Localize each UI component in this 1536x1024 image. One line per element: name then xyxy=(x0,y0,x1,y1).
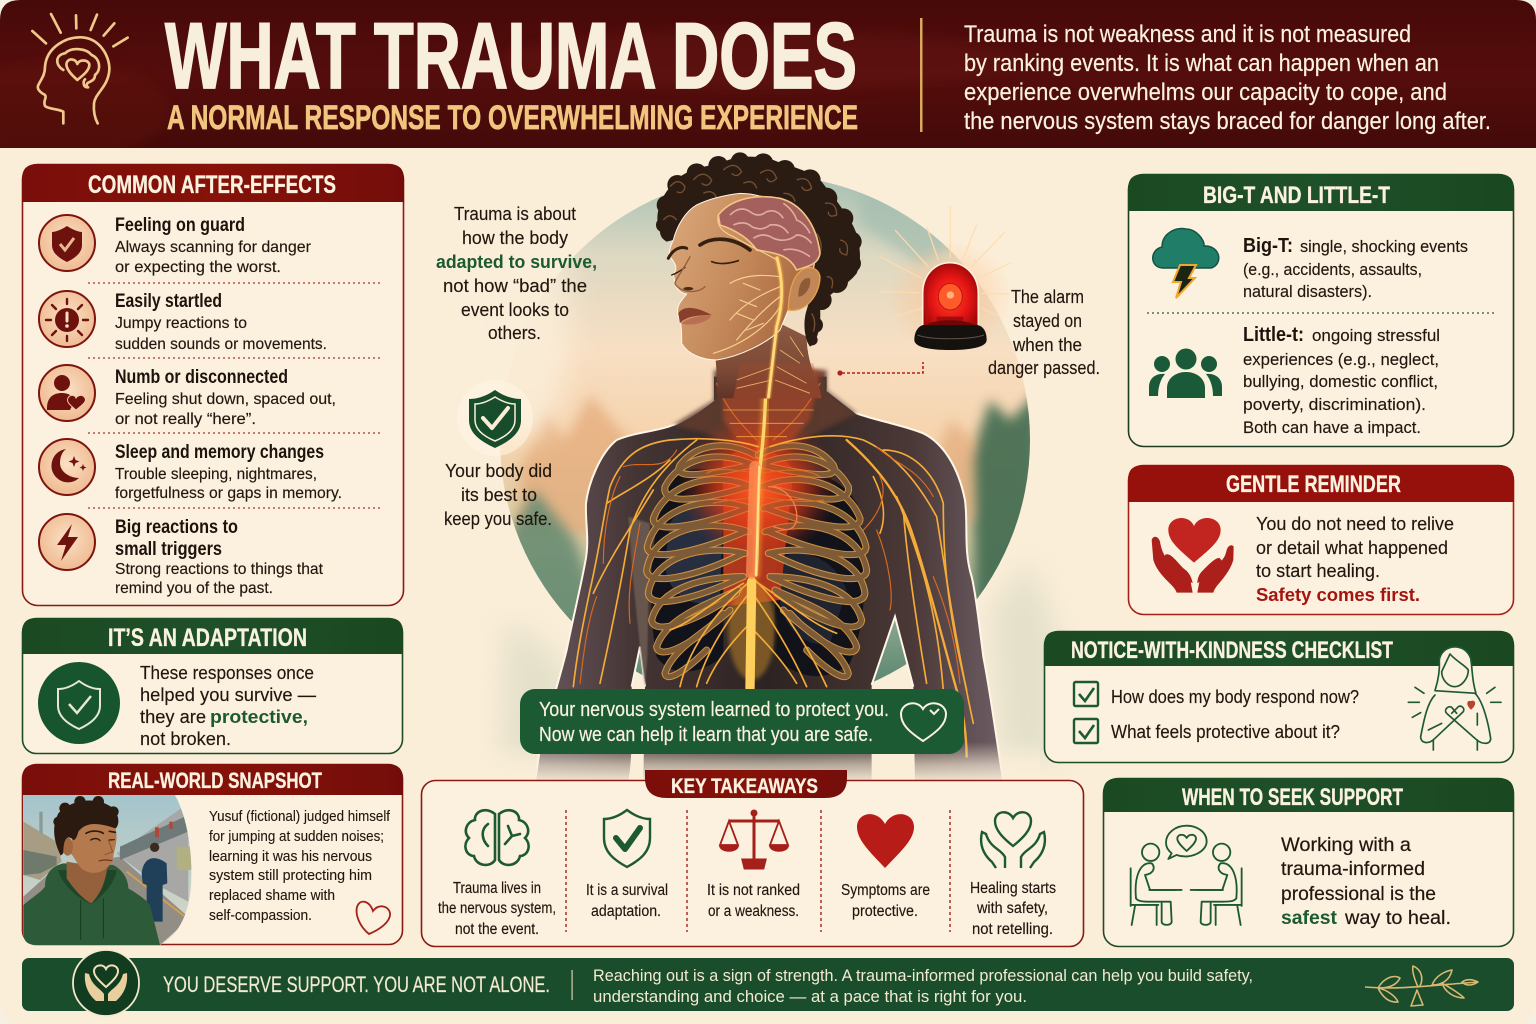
heart outline xyxy=(768,487,797,530)
item: big reactions: remind you of the past. xyxy=(115,580,273,597)
callout: your body did its best xyxy=(444,461,552,529)
figure torso and arms xyxy=(535,370,1003,782)
text: helped you survive — xyxy=(140,685,316,705)
brain xyxy=(718,197,820,270)
footer text: Reaching out is a sign of strength. A trauma-informed professional can help you build safety, xyxy=(593,966,1253,985)
header intro text: experience overwhelms our capacity to cope, and xyxy=(964,79,1447,106)
check item 1: How does my body respond now? xyxy=(1111,687,1359,707)
central illustration: nervous system figure xyxy=(480,152,1060,784)
support text: way to heal. xyxy=(1344,908,1451,929)
icon: leafy branch xyxy=(1365,966,1478,1006)
takeaway: nervous system: Trauma lives in xyxy=(453,880,541,897)
heading: IT’S AN ADAPTATION xyxy=(108,624,307,652)
panel: it's an adaptation xyxy=(22,618,403,754)
takeaway: survival adaptation: It is a survival xyxy=(586,882,668,899)
icon: people group xyxy=(1149,348,1222,398)
icon: outline heart xyxy=(357,902,390,934)
takeaway: protective symptoms: protective. xyxy=(852,903,918,920)
support text: safest xyxy=(1281,908,1338,929)
icon: red alarm xyxy=(880,207,1013,353)
callout: body adaptation: event looks to xyxy=(461,300,569,320)
item: sleep and memory: forgetfulness or gaps in memory. xyxy=(115,485,342,502)
facial features xyxy=(668,239,750,291)
icon: heart outline xyxy=(901,703,946,741)
icon: shield in circle xyxy=(38,662,120,744)
story text: for jumping at sudden noises; xyxy=(209,828,384,845)
callout: alarm stayed on: stayed on xyxy=(1013,311,1082,331)
big-T text: natural disasters). xyxy=(1243,282,1372,301)
big-T text: Big-T: xyxy=(1243,235,1293,257)
reminder text: to start healing. xyxy=(1256,561,1380,581)
callout: alarm stayed on xyxy=(988,287,1100,378)
face nerves xyxy=(713,215,780,353)
icon: two people talking xyxy=(1131,826,1242,925)
caption: nervous system learned: Now we can help it learn that you are safe. xyxy=(539,724,873,746)
callout: body adaptation: Trauma is about xyxy=(454,204,576,224)
header intro text: Trauma is not weakness and it is not measured xyxy=(964,21,1411,48)
text: protective, xyxy=(210,707,308,727)
item: big reactions: Big reactions to xyxy=(115,517,238,538)
icon: head with brain and heart xyxy=(32,14,128,123)
header intro text xyxy=(964,21,1491,135)
item: sleep and memory: Trouble sleeping, nightmares, xyxy=(115,466,317,483)
item: easily startled: Easily startled xyxy=(115,291,222,312)
footer headline: YOU DESERVE SUPPORT. YOU ARE NOT ALONE. xyxy=(163,972,550,997)
big-T text: (e.g., accidents, assaults, xyxy=(1243,260,1422,279)
item: numb or disconnected: or not really “here”. xyxy=(115,411,256,428)
features xyxy=(86,831,115,861)
callout: alarm stayed on: when the xyxy=(1012,335,1082,355)
takeaway: healing starts with safety: with safety, xyxy=(976,900,1048,917)
item: feeling on guard: Feeling on guard xyxy=(115,215,245,236)
item: big reactions xyxy=(39,514,324,597)
icon: woman hands on heart xyxy=(1408,647,1501,750)
item: big reactions: Strong reactions to things that xyxy=(115,561,324,578)
little-t text xyxy=(1243,324,1440,437)
callout: body adaptation xyxy=(436,204,597,343)
title: WHAT TRAUMA DOES xyxy=(165,3,857,108)
item: big reactions: small triggers xyxy=(115,539,222,560)
heading: REAL-WORLD SNAPSHOT xyxy=(108,768,322,793)
little-t text: experiences (e.g., neglect, xyxy=(1243,350,1439,369)
icon: safety shield xyxy=(457,380,533,456)
callout: your body did its best: Your body did xyxy=(445,461,552,481)
takeaway: survival adaptation: adaptation. xyxy=(591,903,661,920)
platform xyxy=(23,857,190,945)
panel: common after-effects xyxy=(22,164,404,606)
alarm connector line xyxy=(837,362,923,376)
text xyxy=(140,663,316,749)
reminder text: or detail what happened xyxy=(1256,538,1448,558)
check item 2: What feels protective about it? xyxy=(1111,722,1340,742)
hoodie xyxy=(23,863,160,945)
panel: gentle reminder xyxy=(1128,465,1514,614)
check item 1 xyxy=(1074,682,1359,707)
check item 2 xyxy=(1074,719,1340,743)
heading: GENTLE REMINDER xyxy=(1226,471,1401,498)
left misty fade xyxy=(480,200,570,440)
text: they are xyxy=(140,707,206,727)
little-t text: Both can have a impact. xyxy=(1243,418,1421,437)
icon: hands holding heart xyxy=(1152,518,1234,593)
text: These responses once xyxy=(140,663,314,683)
callout: your body did its best: its best to xyxy=(461,485,537,505)
heading: NOTICE-WITH-KINDNESS CHECKLIST xyxy=(1071,637,1393,664)
fade at figure bottom xyxy=(480,742,1040,784)
face xyxy=(69,820,117,873)
background man xyxy=(142,858,167,922)
callout: body adaptation: adapted to survive, xyxy=(436,252,597,272)
photo: young man on train platform xyxy=(23,795,198,945)
heading: COMMON AFTER-EFFECTS xyxy=(88,171,336,199)
nerve branches xyxy=(573,383,973,757)
caption: nervous system learned xyxy=(520,689,964,754)
lungs xyxy=(651,469,723,672)
panel: big-t and little-t xyxy=(1128,174,1514,446)
takeaway: healing starts with safety xyxy=(970,812,1056,938)
story text xyxy=(209,808,391,924)
item: easily startled: sudden sounds or movements. xyxy=(115,336,327,353)
story text: replaced shame with xyxy=(209,887,335,904)
support text: trauma-informed xyxy=(1281,859,1425,880)
item: easily startled xyxy=(39,291,327,353)
takeaway: protective symptoms xyxy=(841,814,930,920)
text: not broken. xyxy=(140,729,231,749)
background disc with forest xyxy=(480,175,1060,770)
takeaway: not ranked: It is not ranked xyxy=(707,882,800,899)
ear xyxy=(788,268,820,310)
icon: hands and heart badge xyxy=(73,950,139,1016)
spine and central nerve xyxy=(750,380,766,688)
callout: alarm stayed on: The alarm xyxy=(1011,287,1084,307)
figure head xyxy=(656,152,862,398)
panel: real-world snapshot xyxy=(22,764,403,945)
reminder text: Safety comes first. xyxy=(1256,585,1420,605)
panel: key takeaways xyxy=(422,770,1084,946)
story text: system still protecting him xyxy=(209,867,372,884)
item: feeling on guard xyxy=(39,215,312,276)
takeaway: protective symptoms: Symptoms are xyxy=(841,882,930,899)
callout: body adaptation: how the body xyxy=(462,228,568,248)
item: numb or disconnected: Feeling shut down, spaced out, xyxy=(115,391,336,408)
support text xyxy=(1281,835,1451,929)
lateral chest xyxy=(628,517,650,687)
takeaway: not ranked: or a weakness. xyxy=(708,903,799,920)
callout: your body did its best: keep you safe. xyxy=(444,509,552,529)
body highlight rim xyxy=(535,390,1003,782)
takeaway: healing starts with safety: not retelling. xyxy=(972,921,1053,938)
panel: when to seek support xyxy=(1103,778,1514,946)
reminder text: You do not need to relive xyxy=(1256,514,1454,534)
header banner xyxy=(0,0,1536,160)
face xyxy=(669,193,817,360)
chest glow overlay xyxy=(695,427,822,553)
callout: alarm stayed on: danger passed. xyxy=(988,358,1100,378)
trapezius and neck base xyxy=(673,370,857,453)
takeaway: healing starts with safety: Healing starts xyxy=(970,880,1056,897)
footer text: understanding and choice — at a pace that is right for you. xyxy=(593,987,1027,1006)
little-t text: Little-t: xyxy=(1243,324,1304,346)
item: numb or disconnected: Numb or disconnected xyxy=(115,367,288,388)
item: feeling on guard: or expecting the worst. xyxy=(115,259,281,276)
story text: self-compassion. xyxy=(209,907,312,924)
chest glow xyxy=(723,449,793,607)
big-T text: single, shocking events xyxy=(1300,237,1468,256)
item: feeling on guard: Always scanning for danger xyxy=(115,239,312,256)
takeaway: nervous system xyxy=(438,810,556,938)
footer banner xyxy=(22,950,1514,1016)
footer text xyxy=(593,966,1253,1006)
big-T text xyxy=(1243,235,1468,301)
item: easily startled: Jumpy reactions to xyxy=(115,315,247,332)
hair xyxy=(54,800,118,856)
header intro text: by ranking events. It is what can happen when an xyxy=(964,50,1439,77)
takeaway: not ranked xyxy=(707,810,800,920)
support text: Working with a xyxy=(1281,835,1411,856)
hair xyxy=(656,152,862,347)
heading: WHEN TO SEEK SUPPORT xyxy=(1182,784,1403,811)
little-t text: poverty, discrimination). xyxy=(1243,395,1426,414)
story text: learning it was his nervous xyxy=(209,848,372,865)
little-t text: ongoing stressful xyxy=(1312,326,1440,345)
subtitle: A NORMAL RESPONSE TO OVERWHELMING EXPERIENCE xyxy=(167,99,858,137)
item: sleep and memory xyxy=(39,439,342,502)
callout: body adaptation: not how “bad” the xyxy=(443,276,587,296)
takeaway: nervous system: not the event. xyxy=(455,921,539,938)
tab heading: KEY TAKEAWAYS xyxy=(671,775,818,798)
callout: body adaptation: others. xyxy=(488,323,541,343)
panel: notice-with-kindness checklist xyxy=(1044,631,1514,762)
support text: professional is the xyxy=(1281,884,1436,905)
takeaway: nervous system: the nervous system, xyxy=(438,900,556,917)
caption: nervous system learned: Your nervous system learned to protect you. xyxy=(539,699,889,721)
heading: BIG-T AND LITTLE-T xyxy=(1203,182,1390,209)
item: sleep and memory: Sleep and memory changes xyxy=(115,442,324,463)
body silhouette xyxy=(535,377,1003,782)
takeaway: survival adaptation xyxy=(586,810,668,920)
station buildings xyxy=(23,822,62,880)
reminder text xyxy=(1256,514,1454,605)
story text: Yusuf (fictional) judged himself xyxy=(209,808,391,825)
icon: storm cloud xyxy=(1153,229,1219,298)
neck xyxy=(715,323,825,398)
ribcage xyxy=(647,446,867,677)
item: numb or disconnected xyxy=(39,365,336,428)
train xyxy=(117,803,188,902)
little-t text: bullying, domestic conflict, xyxy=(1243,372,1438,391)
